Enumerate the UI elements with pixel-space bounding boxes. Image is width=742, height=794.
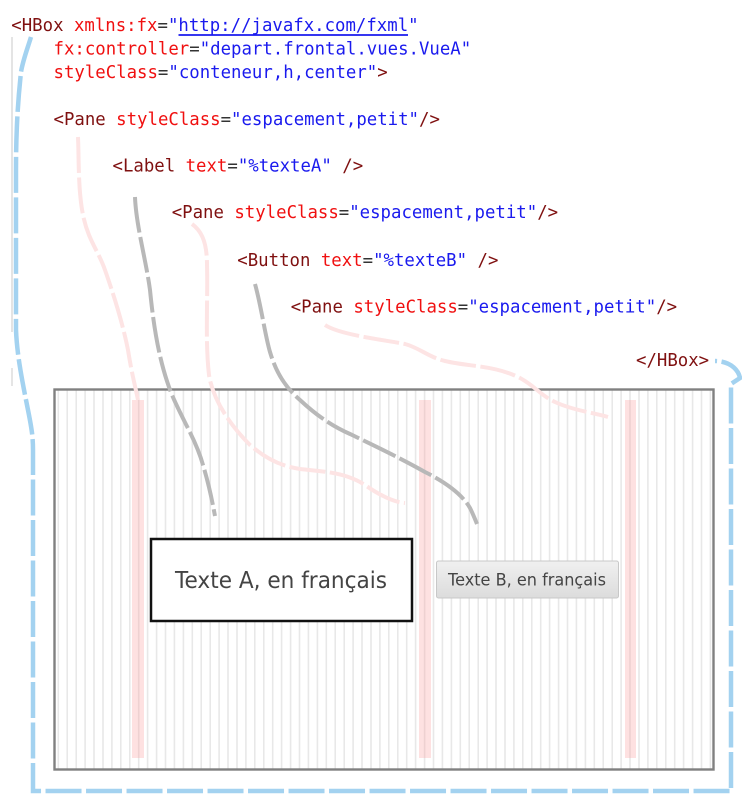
indent guides [11,37,13,386]
spacer bar 1 [132,400,144,758]
code line: Pane 3: <Pane styleClass="espacement,petit"/> [291,298,677,318]
link underline [178,34,408,36]
code line: Pane 2: <Pane styleClass="espacement,petit"/> [172,203,558,223]
Label component [151,539,412,621]
connector: first Pane [78,137,138,400]
FXML code [11,16,709,371]
code line: HBox close: </HBox> [636,351,709,371]
Label component: Texte A, en français [174,568,387,594]
grid columns [58,390,710,769]
connector: second Pane [192,224,405,503]
window preview panel [54,389,714,770]
window frame [54,390,714,770]
spacer bar 3 [625,400,636,758]
code line: controller: fx:controller="depart.frontal.vues.VueA" [54,40,471,60]
Button component [436,561,618,598]
Button component: Texte B, en français [447,570,606,590]
connector: third Pane [325,325,608,417]
code line: Pane 1: <Pane styleClass="espacement,petit"/> [54,110,440,130]
code line: Button: <Button text="%texteB" /> [237,251,498,271]
code line: HBox open: <HBox xmlns:fx="http://javafx.com/fxml" [11,16,419,36]
code line: Label: <Label text="%texteA" /> [112,156,363,176]
connector: Button [255,284,477,524]
spacer bar 2 [419,400,431,758]
connector: Label [135,197,215,516]
code line: style class: styleClass="conteneur,h,center"> [54,63,388,83]
